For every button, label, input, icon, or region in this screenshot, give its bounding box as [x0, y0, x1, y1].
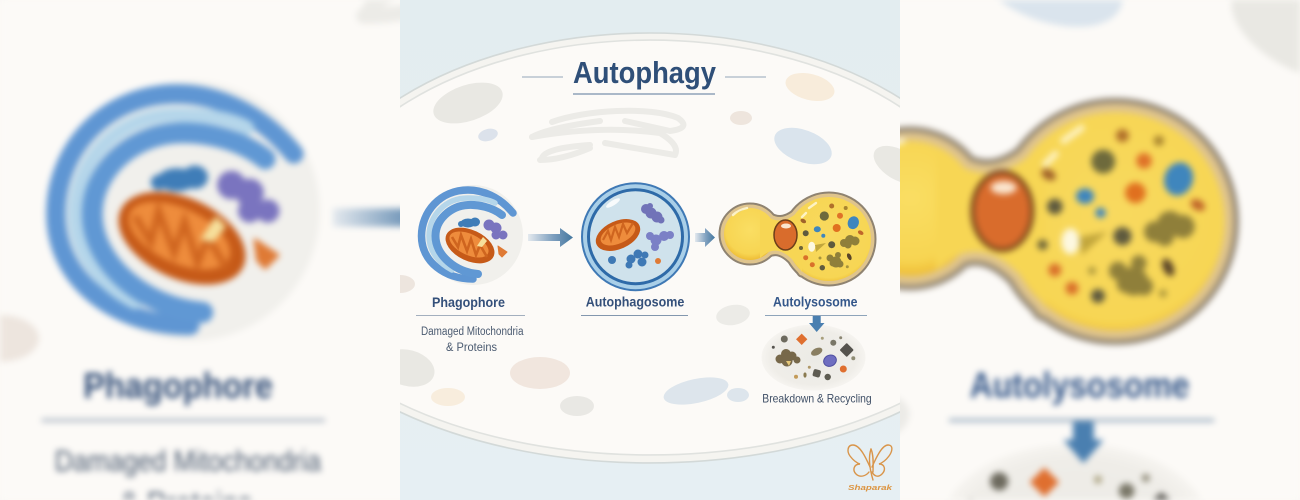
- arrow: autophagosome to autolysosome: [695, 228, 715, 247]
- right yellow lobe: [787, 197, 871, 281]
- stage 1: phagophore illustration: [422, 185, 523, 285]
- highlights: [733, 203, 816, 217]
- autophagosome label: Autophagosome: [586, 294, 684, 310]
- autolysosome label: Autolysosome: [773, 294, 858, 310]
- engulfed mitochondrion: [596, 219, 640, 251]
- stage 2: autophagosome illustration: [582, 183, 689, 290]
- engulfed violet aggregate: [646, 231, 674, 251]
- arrow: down to breakdown: [809, 316, 824, 332]
- fused vesicle outline: [724, 197, 871, 281]
- cell membrane and cytoplasm: [265, 33, 1035, 463]
- autolysosome label: [765, 294, 867, 316]
- watermark: butterfly logo: [848, 445, 893, 492]
- background golgi apparatus: [532, 111, 683, 160]
- phagophore label: Phagophore: [432, 294, 505, 310]
- junction orange vesicle: [774, 220, 797, 250]
- damaged mitochondrion: [440, 220, 500, 271]
- central infographic panel: [400, 0, 900, 500]
- orange fragment: [498, 246, 507, 257]
- phagophore label: [416, 294, 525, 316]
- orange fragment: [655, 258, 661, 264]
- arrow: phagophore to autophagosome: [528, 228, 573, 247]
- title: Autophagy: [573, 55, 717, 90]
- purple protein aggregate: [484, 220, 508, 240]
- digesting contents: [799, 204, 864, 270]
- engulfed blue proteins: [608, 250, 648, 268]
- phagophore double membrane: [422, 190, 513, 279]
- phagophore description: [421, 326, 524, 354]
- breakdown label: Breakdown & Recycling: [762, 392, 872, 406]
- engulfed purple proteins: [641, 203, 664, 224]
- watermark: butterfly logo: Shaparak: [848, 483, 893, 492]
- left yellow lobe: [724, 208, 776, 260]
- phagophore description: Damaged Mitochondria: [421, 326, 524, 338]
- background organelles: [377, 68, 931, 416]
- stage 3: autolysosome illustration: [724, 197, 871, 281]
- breakdown and recycling debris pile: [762, 324, 866, 390]
- blue protein aggregate: [458, 218, 480, 228]
- olive debris clumps: [826, 235, 860, 268]
- autophagosome label: [581, 296, 688, 316]
- phagophore description: & Proteins: [446, 342, 497, 354]
